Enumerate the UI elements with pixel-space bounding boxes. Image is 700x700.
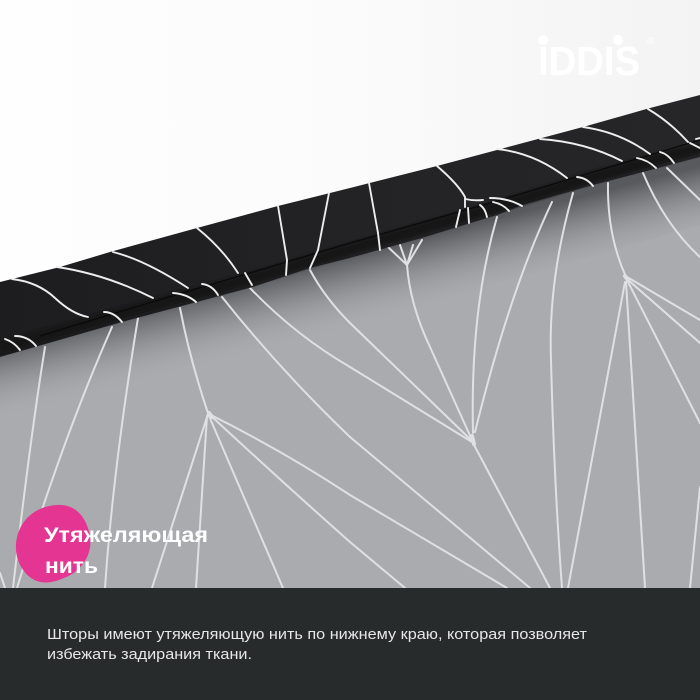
logo dots: [538, 35, 623, 45]
pink blob: [16, 505, 90, 582]
heading: weighted thread: Утяжеляющая: [44, 524, 208, 547]
registered mark: ®: [647, 36, 655, 47]
fabric line pattern: [0, 168, 700, 588]
caption text: Шторы имеют утяжеляющую нить по нижнему краю, которая позволяет: [47, 627, 587, 643]
seam stitch: [40, 140, 700, 336]
node D star: [608, 183, 626, 277]
right lines: [643, 173, 700, 257]
caption text: избежать задирания ткани.: [47, 647, 252, 663]
hem line pattern: [5, 109, 700, 350]
node A star: [180, 308, 208, 413]
small fan node C: [388, 247, 407, 265]
heading: weighted thread: нить: [45, 555, 98, 578]
heading: weighted thread: [44, 524, 208, 578]
node B lines: [250, 288, 472, 442]
central long line: [551, 193, 573, 588]
bottom caption panel: [0, 588, 700, 700]
fabric shadow under hem: [0, 150, 700, 426]
black hem band: [0, 95, 700, 357]
long sweeping lines: [222, 297, 530, 588]
white background wall: [0, 0, 700, 300]
hem fold shade: [0, 148, 700, 348]
caption text: [47, 627, 587, 663]
iDDiS logo: IDDIS: [538, 38, 640, 84]
left lines: [13, 347, 45, 588]
gray curtain fabric: [0, 150, 700, 590]
